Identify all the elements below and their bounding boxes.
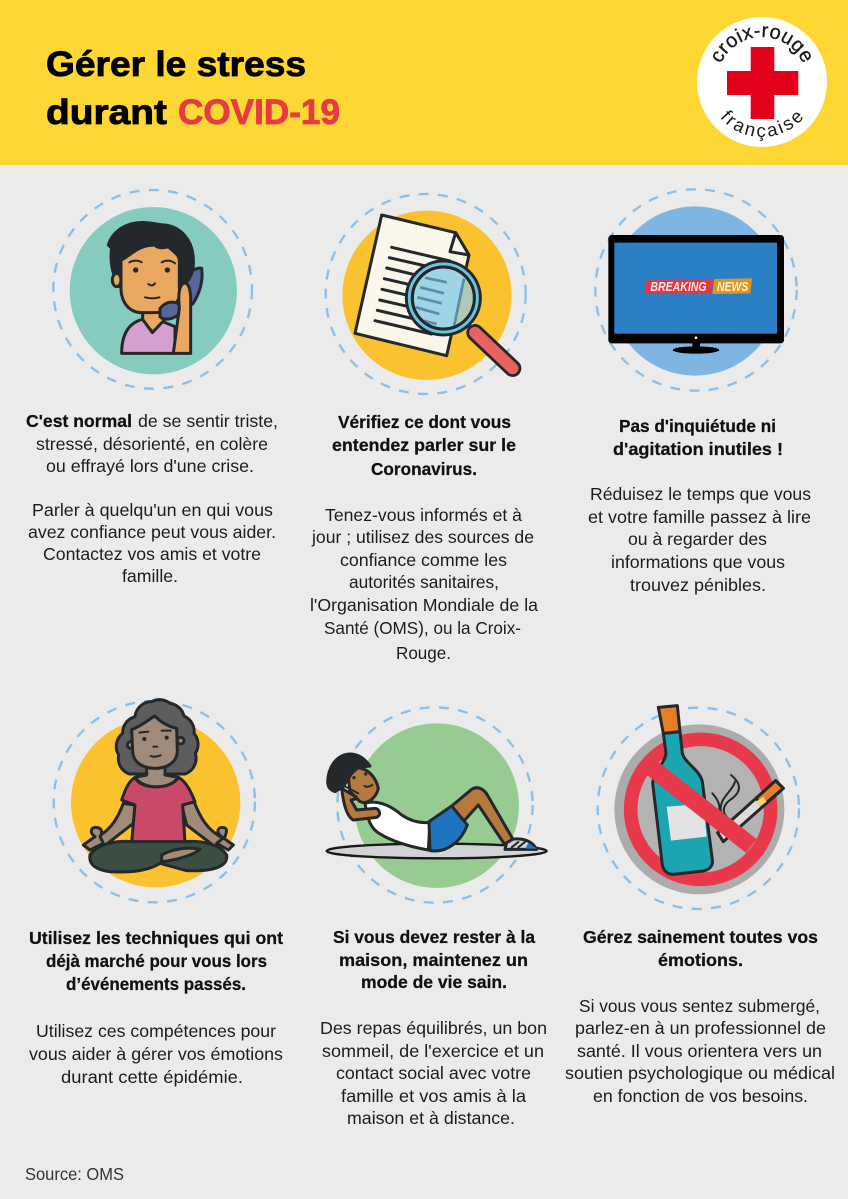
text block: durant cette épidémie. (61, 1067, 243, 1087)
text block: mode de vie sain. (361, 972, 507, 992)
text block: de se sentir triste, (138, 411, 278, 431)
icon: no alcohol, no smoking sign (598, 706, 799, 909)
text block: avez confiance peut vous aider. (28, 522, 276, 542)
text block: d’événements passés. (66, 974, 246, 994)
text block: Si vous vous sentez submergé, (579, 996, 820, 1016)
text block: famille. (122, 566, 178, 586)
panel: gérer ses émotions (565, 706, 835, 1106)
text block: jour ; utilisez des sources de (311, 527, 534, 547)
header banner (0, 0, 848, 165)
text block (565, 927, 835, 1106)
text block: Réduisez le temps que vous (590, 484, 811, 504)
text block (29, 928, 283, 1087)
text block: émotions. (658, 950, 743, 970)
logo: Croix-Rouge française: française (720, 110, 802, 141)
panel: techniques déjà utilisées (29, 700, 283, 1087)
title: Gérer le stress (46, 45, 306, 84)
icon: person doing sit-ups on a mat (327, 707, 547, 903)
icon: television with breaking news: BREAKING (650, 279, 707, 294)
text block: d'agitation inutiles ! (613, 439, 783, 459)
text block: Tenez-vous informés et à (325, 505, 522, 525)
title: COVID-19 (178, 93, 340, 132)
text block: confiance comme les (340, 550, 507, 570)
text block: ou effrayé lors d'une crise. (46, 456, 254, 476)
icon: television with breaking news: NEWS (717, 279, 749, 294)
text block: santé. Il vous orientera vers un (577, 1041, 822, 1061)
text block: maison, maintenez un (339, 950, 528, 970)
panel: vérifier les informations (310, 194, 538, 663)
text block: C'est normal (26, 411, 132, 431)
text block: Pas d'inquiétude ni (619, 416, 776, 436)
text block: parlez-en à un professionnel de (575, 1018, 826, 1038)
text block: maison et à distance. (347, 1108, 515, 1128)
text block: Utilisez ces compétences pour (36, 1021, 276, 1041)
text block: Rouge. (396, 643, 451, 663)
text block: Contactez vos amis et votre (43, 544, 261, 564)
text block: Coronavirus. (371, 459, 477, 479)
text block: l'Organisation Mondiale de la (310, 595, 538, 615)
text block: entendez parler sur le (332, 435, 516, 455)
text block: Parler à quelqu'un en qui vous (32, 500, 273, 520)
text block (320, 927, 547, 1128)
text block: trouvez pénibles. (630, 575, 766, 595)
icon: television with breaking news (595, 189, 797, 391)
text block: ou à regarder des (628, 529, 767, 549)
text block: Des repas équilibrés, un bon (320, 1018, 547, 1038)
text block (26, 411, 278, 586)
panel: parler à quelqu'un (26, 190, 278, 586)
icon: person on the phone (53, 190, 252, 389)
text block: Santé (OMS), ou la Croix- (324, 618, 521, 638)
text block: autorités sanitaires, (349, 572, 499, 592)
text block (310, 412, 538, 663)
text block: et votre famille passez à lire (588, 507, 811, 527)
text block: informations que vous (611, 552, 785, 572)
text block (588, 416, 811, 595)
text block: en fonction de vos besoins. (593, 1086, 808, 1106)
logo: Croix-Rouge française (697, 17, 827, 147)
source note: Source: OMS (25, 1164, 124, 1184)
icon: document and magnifying glass (326, 194, 526, 394)
text block: déjà marché pour vous lors (46, 951, 267, 971)
text block: sommeil, de l'exercice et un (322, 1041, 544, 1061)
logo: Croix-Rouge française: croix-rouge (713, 26, 811, 62)
text block: vous aider à gérer vos émotions (29, 1044, 283, 1064)
panel: mode de vie sain (320, 707, 547, 1128)
text block: Gérez sainement toutes vos (583, 927, 818, 947)
text block: Si vous devez rester à la (333, 927, 535, 947)
text block: famille et vos amis à la (341, 1086, 526, 1106)
text block: contact social avec votre (336, 1063, 531, 1083)
text block: stressé, désorienté, en colère (36, 434, 268, 454)
text block: soutien psychologique ou médical (565, 1063, 835, 1083)
text block: Vérifiez ce dont vous (338, 412, 511, 432)
icon: woman meditating (54, 700, 255, 902)
title: durant (46, 93, 167, 132)
panel: pas d'inquiétude (588, 189, 811, 595)
title (46, 45, 340, 132)
text block: Utilisez les techniques qui ont (29, 928, 283, 948)
